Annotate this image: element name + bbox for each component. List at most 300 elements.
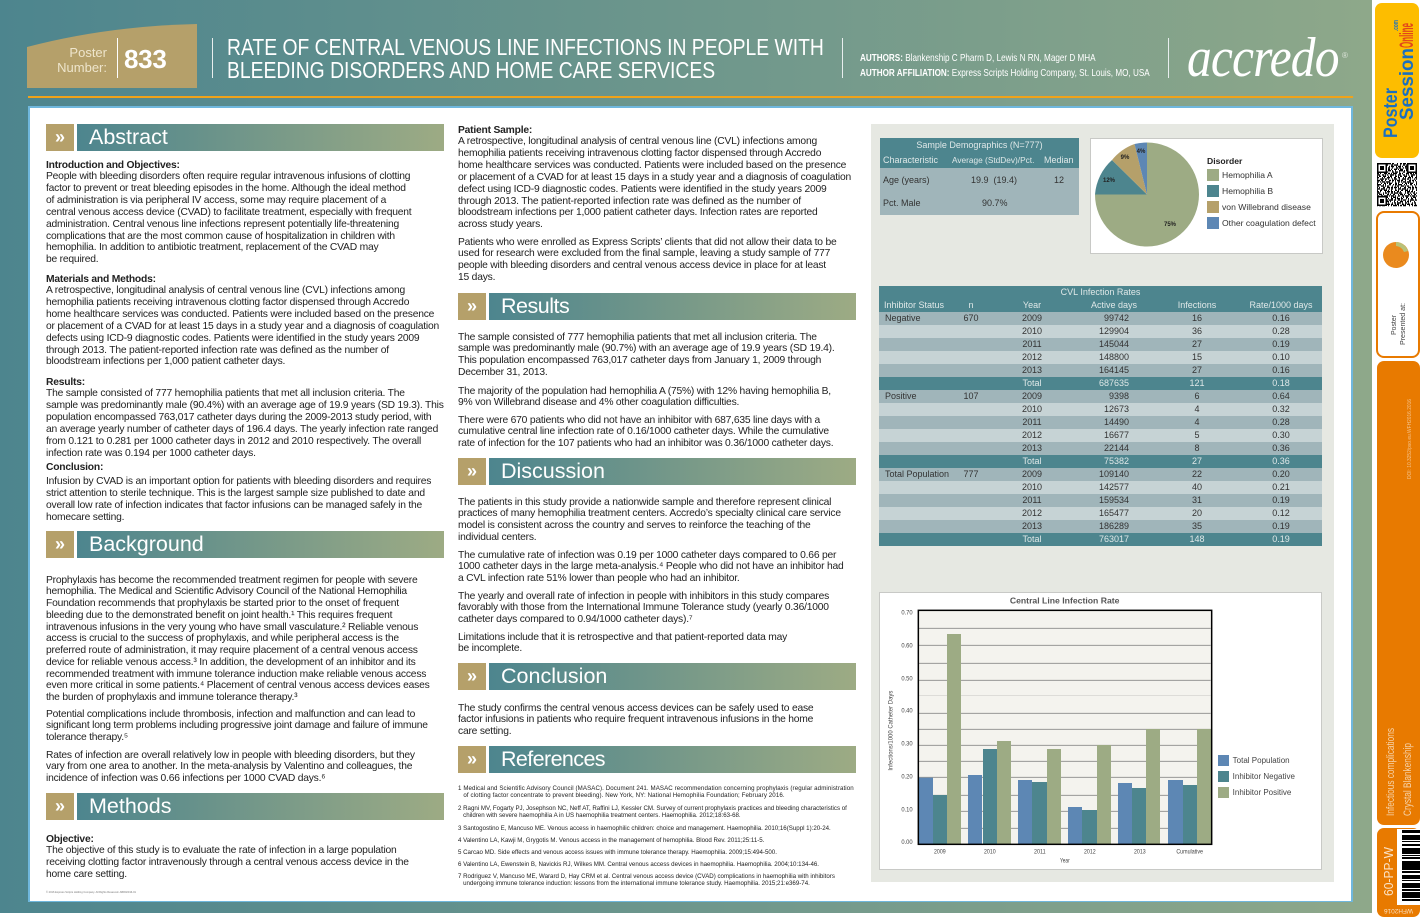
heading: discussion: » xyxy=(467,461,477,481)
table: CVL infection rates: Negative xyxy=(885,313,921,323)
table: CVL infection rates: 129904 xyxy=(1099,326,1129,336)
heading: discussion: Discussion xyxy=(501,459,605,483)
text: conclusion xyxy=(46,462,431,523)
text: exclusions: people with bleeding disorders and central venous access device in place for at least xyxy=(458,260,826,271)
text: prophylaxis xyxy=(46,574,430,703)
bar: poster topic and author xyxy=(1377,361,1420,825)
table: CVL infection rates: Positive xyxy=(885,391,917,401)
logo: poster session online xyxy=(1375,3,1419,158)
heading: references xyxy=(458,746,856,773)
text: conclusion body: The study confirms the central venous access devices can be safely used to ease xyxy=(458,702,813,714)
text: inhibitor: rate of infection for the 107 patients who had an inhibitor was 0.36/1000 catheter days. xyxy=(458,438,833,449)
chart: central line infection rate: Cumulative xyxy=(1176,848,1203,855)
text: conclusion body xyxy=(458,702,814,737)
table: CVL infection rates: 164145 xyxy=(1099,365,1129,375)
text: prophylaxis: Foundation recommends that prophylaxis be started prior to the onset of frequent xyxy=(46,598,399,609)
icon: QR code xyxy=(1377,163,1417,206)
table: CVL infection rates: 0.28 xyxy=(1272,326,1290,336)
text: prophylaxis: preferred route of administration, it may require placement of a central venous access xyxy=(46,645,418,656)
table: CVL infection rates: 0.32 xyxy=(1272,404,1290,414)
text: yearly rate: catheter days compared to 0.94/1000 catheter days).⁷ xyxy=(458,614,692,625)
table: CVL infection rates: Total xyxy=(1022,378,1042,388)
text: conclusion: overall low rate of infection indicates that factor infusions can be managed safely in the xyxy=(46,500,422,511)
panel: data figures xyxy=(871,124,1334,882)
text: results: population encompassed 763,017 catheter days during the 2009-2013 study period, with xyxy=(46,412,431,423)
table: CVL infection rates: 0.12 xyxy=(1272,508,1290,518)
chart: disorder pie: Other coagulation defect xyxy=(1222,218,1316,228)
text: yearly rate xyxy=(458,590,829,625)
table: CVL infection rates: 2012 xyxy=(1022,430,1042,440)
accredo logo: accredo xyxy=(1187,27,1339,89)
poster number badge: Number: xyxy=(57,60,107,75)
chart: central line infection rate xyxy=(879,592,1322,870)
table: CVL infection rates: 16677 xyxy=(1104,430,1129,440)
text: introduction and objectives: central venous access device (CVAD) to facilitate treatment, especially with frequent xyxy=(46,207,411,218)
text: materials and methods: A retrospective, longitudinal analysis of central venous line (CVL) infections among xyxy=(46,285,405,296)
text: complications: tolerance therapy.⁵ xyxy=(46,732,128,743)
text: objective: home care setting. xyxy=(46,869,127,880)
text: prophylaxis: access is crucial to the success of prophylaxis, and while peripheral access is the xyxy=(46,633,399,644)
text: sample xyxy=(458,332,835,378)
accredo logo xyxy=(1168,38,1353,78)
text: results: Results: xyxy=(46,376,85,388)
table: CVL infection rates: 6 xyxy=(1194,391,1200,401)
text: patient sample: defect using ICD-9 diagnostic codes. Patients were identified in the study years 2009 xyxy=(458,184,827,195)
table: CVL infection rates: 20 xyxy=(1192,508,1202,518)
text: conclusion body: factor infusions in patients who require frequent intravenous infusions in the home xyxy=(458,714,813,725)
text: sample: This population encompassed 763,017 catheter days from January 1, 2009 through xyxy=(458,355,821,366)
table: CVL infection rates: 0.10 xyxy=(1272,352,1290,362)
barcode label: 60-PP-W xyxy=(1381,846,1396,896)
table: CVL infection rates: 2010 xyxy=(1022,404,1042,414)
table: sample demographics: 12 xyxy=(1054,175,1064,185)
table: CVL infection rates: 0.16 xyxy=(1272,365,1290,375)
text: materials and methods: Materials and Methods: xyxy=(46,274,156,284)
chart: central line infection rate: Inhibitor Positive xyxy=(1233,788,1292,797)
table: CVL infection rates: 2009 xyxy=(1022,469,1042,479)
text: population: 9% von Willebrand disease and 4% other coagulation difficulties. xyxy=(458,397,739,408)
text: patient sample: home healthcare services was conducted. Patients were included based on the presence xyxy=(458,160,846,171)
reference list: 1 Medical and Scientific Advisory Council (MASAC). Document 241. MASAC recommendation concerning prophylaxis (regular administration of clotting factor concentrate to prevent bleeding). New York, NY: National Hemophilia Foundation; February 2016. xyxy=(458,785,854,799)
table: CVL infection rates: 2010 xyxy=(1022,482,1042,492)
table: sample demographics: Sample Demographics (N=777) xyxy=(916,140,1043,150)
table: CVL infection rates: 2011 xyxy=(1022,495,1042,505)
text: conclusion: homecare setting. xyxy=(46,512,124,523)
box: presented at: Presented at: xyxy=(1400,303,1407,345)
logo: poster session online: .com xyxy=(1393,20,1400,31)
panel: conclusion xyxy=(458,663,856,737)
barcode label: WFH2016 xyxy=(1383,907,1413,913)
chart: central line infection rate: 0.00 xyxy=(901,839,913,846)
chart: disorder pie: Hemophilia B xyxy=(1222,186,1273,196)
heading: background: Background xyxy=(89,532,204,556)
table: sample demographics: Pct. Male xyxy=(883,198,921,208)
text: objective: receiving clotting factor intravenously through a central venous access device in the xyxy=(46,857,409,868)
text: sample: December 31, 2013. xyxy=(458,367,548,378)
panel: methods xyxy=(46,793,444,894)
table: CVL infection rates: Active days xyxy=(1091,300,1137,310)
text: results: an average yearly number of catheter days of 196.4 days. The yearly infection rate ranged xyxy=(46,424,438,435)
reference list: 6 Valentino LA, Ewenstein B, Navickis RJ, Wilkes MM. Central venous access devices in haemophilia. Haemophilia. 2004;10:134-46. xyxy=(458,861,819,868)
table: CVL infection rates: 22 xyxy=(1192,469,1202,479)
header rule xyxy=(28,96,1353,98)
chart: central line infection rate: 0.70 xyxy=(901,609,913,616)
heading: conclusion xyxy=(458,663,856,690)
table: CVL infection rates: 5 xyxy=(1194,430,1200,440)
table: sample demographics: Characteristic xyxy=(883,155,938,165)
text: conclusion body: care setting. xyxy=(458,726,511,737)
table: CVL infection rates: 35 xyxy=(1192,521,1202,531)
reference list: 7 Rodriguez V, Mancuso ME, Warard D, Hay CRM et al. Central venous access device (CVAD) complications in haemophilia with inhibitors undergoing immune tolerance induction: lessons from the international immune tolerance study. Haemophilia. 2015;21:e369-74. xyxy=(458,873,835,887)
table: CVL infection rates: 99742 xyxy=(1104,313,1129,323)
table: CVL infection rates: 15 xyxy=(1192,352,1202,362)
table: CVL infection rates: 186289 xyxy=(1099,521,1129,531)
chart: central line infection rate: 0.60 xyxy=(901,642,913,649)
panel: discussion xyxy=(458,458,856,654)
text: exclusions: 15 days. xyxy=(458,272,495,283)
table: CVL infection rates: 0.21 xyxy=(1272,482,1290,492)
table: CVL infection rates: Inhibitor Status xyxy=(884,300,944,310)
text: limitations: be incomplete. xyxy=(458,643,522,654)
box: presented at xyxy=(1377,212,1419,357)
text: introduction and objectives: administration. Central venous line infections represent potentially life-threatening xyxy=(46,219,399,230)
table: CVL infection rates: 2013 xyxy=(1022,443,1042,453)
table: CVL infection rates: 27 xyxy=(1192,365,1202,375)
text: rates of infection: incidence of infection was 0.66 infections per 1000 CVAD days.⁶ xyxy=(46,773,325,784)
text: sample: The sample consisted of 777 hemophilia patients that met all inclusion criteria. The xyxy=(458,332,817,342)
text: yearly rate: favorably with those from the International Immune Tolerance study (yearly 0.36/1000 xyxy=(458,602,829,613)
table: CVL infection rates: 0.30 xyxy=(1272,430,1290,440)
chart: disorder pie: 4% xyxy=(1137,149,1146,155)
table: CVL infection rates: Infections xyxy=(1178,300,1216,310)
chart: central line infection rate: 0.40 xyxy=(901,707,913,714)
chart: central line infection rate: Year xyxy=(1060,857,1070,864)
table: CVL infection rates: 40 xyxy=(1192,482,1202,492)
heading: methods: Methods xyxy=(89,794,171,818)
table: sample demographics: Age (years) xyxy=(883,175,930,185)
table: sample demographics: Average (StdDev)/Pct. xyxy=(952,155,1034,165)
table: CVL infection rates: 763017 xyxy=(1099,534,1129,544)
heading: references: » xyxy=(467,749,477,769)
table: CVL infection rates: 121 xyxy=(1189,378,1205,388)
table: CVL infection rates: 148 xyxy=(1189,534,1205,544)
text: introduction and objectives: factor to prevent or treat bleeding episodes in the home. Although the ideal method xyxy=(46,183,406,194)
text: population: The majority of the population had hemophilia A (75%) with 12% having hemophilia B, xyxy=(458,386,831,396)
text: exclusions: used for research were excluded from the final sample, leaving a study sample of 777 xyxy=(458,248,830,259)
table: CVL infection rates: 31 xyxy=(1192,495,1202,505)
chart: central line infection rate: Central Line Infection Rate xyxy=(1010,596,1120,606)
text: nationwide sample: The patients in this study provide a nationwide sample and therefore represent clinical xyxy=(458,496,831,508)
table: CVL infection rates: Total xyxy=(1022,534,1042,544)
chart: central line infection rate: 0.20 xyxy=(901,773,913,780)
text: prophylaxis: hemophilia. The Medical and Scientific Advisory Council of the National Hemophilia xyxy=(46,586,407,597)
table: CVL infection rates: 22144 xyxy=(1104,443,1129,453)
table: CVL infection rates: 2012 xyxy=(1022,508,1042,518)
table: CVL infection rates: 0.20 xyxy=(1272,469,1290,479)
text: complications xyxy=(46,708,428,743)
reference list xyxy=(458,785,854,887)
reference list: 2 Ragni MV, Fogarty PJ, Josephson NC, Neff AT, Raffini LJ, Kessler CM. Survey of current prophylaxis practices and bleeding characteristics of children with severe haemophilia A in US haemophilia treatment centers. Haemophilia. 2012;18:63-68. xyxy=(458,805,847,819)
text: prophylaxis: bleeding due to the demonstrated benefit on joint health.¹ This requires frequent xyxy=(46,610,392,621)
table: CVL infection rates: 4 xyxy=(1194,404,1200,414)
table: CVL infection rates: 4 xyxy=(1194,417,1200,427)
table: CVL infection rates: 2013 xyxy=(1022,521,1042,531)
text: objective: The objective of this study is to evaluate the rate of infection in a large population xyxy=(46,845,397,856)
table: CVL infection rates: 142577 xyxy=(1099,482,1129,492)
chart: central line infection rate: Total Population xyxy=(1233,756,1290,765)
table: CVL infection rates: Total Population xyxy=(885,469,949,479)
chart: disorder pie: 9% xyxy=(1121,155,1130,161)
table: CVL infection rates: 2010 xyxy=(1022,326,1042,336)
reference list: 4 Valentino LA, Kawji M, Grygotis M. Venous access in the management of hemophilia. Blood Rev. 2011;25:11-5. xyxy=(458,837,764,844)
text: introduction and objectives: hemophilia. In addition to antibiotic treatment, replacement of the CVAD may xyxy=(46,242,378,253)
chart: central line infection rate: 2013 xyxy=(1134,848,1146,855)
text: limitations: Limitations include that it is retrospective and that patient-reported data may xyxy=(458,632,787,642)
text: objective: Objective: xyxy=(46,834,94,844)
reference list: 3 Santogostino E, Mancuso ME. Venous access in haemophilic children: choice and management. Haemophilia. 2010;16(Suppl 1):20-24. xyxy=(458,825,831,832)
text: rates of infection xyxy=(46,750,415,784)
table: CVL infection rates: Year xyxy=(1023,300,1041,310)
text: nationwide sample: practices of many hemophilia treatment centers. Accredo’s specialty clinical care service xyxy=(458,508,841,519)
bar: poster topic and author: DOI: 10.3252/pso.eu.WFH2016.2016 xyxy=(1407,399,1413,479)
table: CVL infection rates: 687635 xyxy=(1099,378,1129,388)
heading: abstract: » xyxy=(55,127,65,147)
text: nationwide sample: model is consistent across the country and serves to reinforce the teaching of the xyxy=(458,520,811,531)
text: introduction and objectives: People with bleeding disorders often require regular intravenous infusions of clotting xyxy=(46,171,410,182)
text: prophylaxis: the burden of prophylaxis and immune tolerance therapy.³ xyxy=(46,692,297,703)
title: RATE OF CENTRAL VENOUS LINE INFECTIONS IN PEOPLE WITH xyxy=(227,34,824,60)
table: CVL infection rates: 36 xyxy=(1192,326,1202,336)
panel: abstract xyxy=(46,124,444,523)
text: patient sample: across study years. xyxy=(458,219,543,230)
logo: poster session online: Poster xyxy=(1381,87,1402,138)
chart: central line infection rate: 2012 xyxy=(1084,848,1096,855)
text: population xyxy=(458,386,831,408)
text: complications: significant long term problems including progressive joint damage and failure of immune xyxy=(46,720,428,731)
title: BLEEDING DISORDERS AND HOME CARE SERVICES xyxy=(227,57,715,83)
heading: results xyxy=(458,293,856,320)
text: patient sample: Patient Sample: xyxy=(458,124,532,136)
table: CVL infection rates: 109140 xyxy=(1099,469,1129,479)
text: cumulative rate: 1000 catheter days in the large meta-analysis.⁴ People who did not have an inhibitor had xyxy=(458,561,844,572)
text: rates of infection: Rates of infection are overall relatively low in people with bleeding disorders, but they xyxy=(46,750,415,760)
text: conclusion: Infusion by CVAD is an important option for patients with bleeding disorders and requires xyxy=(46,476,431,487)
poster number badge: Poster xyxy=(69,45,107,60)
chart: central line infection rate: Inhibitor Negative xyxy=(1233,772,1295,781)
heading: abstract: Abstract xyxy=(89,125,168,149)
text: results xyxy=(46,376,444,459)
text: limitations xyxy=(458,632,788,654)
heading: references: References xyxy=(501,747,605,771)
table: CVL infection rates: 0.16 xyxy=(1272,313,1290,323)
chart: central line infection rate: Infections/1000 Catheter Days xyxy=(888,691,895,771)
chart: disorder pie: 12% xyxy=(1103,178,1116,184)
poster number badge xyxy=(27,24,197,88)
text: exclusions: Patients who were enrolled as Express Scripts’ clients that did not allow their data to be xyxy=(458,236,837,248)
text: inhibitor: cumulative central line infection rate of 0.16/1000 catheter days. While the cumulative xyxy=(458,426,829,437)
heading: methods xyxy=(46,793,444,820)
chart: disorder pie: 75% xyxy=(1164,222,1177,228)
table: CVL infection rates: 9398 xyxy=(1109,391,1129,401)
text: inhibitor xyxy=(458,414,833,449)
panel: patient sample xyxy=(458,124,851,283)
text: patient sample: hemophilia patients receiving intravenous clotting factor dispensed through Accredo xyxy=(458,148,821,159)
heading: results: » xyxy=(467,296,477,316)
table: CVL infection rates: 2011 xyxy=(1022,339,1042,349)
table: CVL infection rates: n xyxy=(968,300,974,310)
box: presented at: Poster xyxy=(1391,314,1398,335)
heading: conclusion: Conclusion xyxy=(501,664,607,688)
table: CVL infection rates: 145044 xyxy=(1099,339,1129,349)
chart: central line infection rate: 2009 xyxy=(934,848,946,855)
heading: conclusion: » xyxy=(467,666,477,686)
text: cumulative rate: The cumulative rate of infection was 0.19 per 1000 catheter days compared to 0.66 per xyxy=(458,550,836,560)
table: CVL infection rates: 0.19 xyxy=(1272,534,1290,544)
panel: poster session sidebar xyxy=(1375,3,1420,917)
text: prophylaxis: Prophylaxis has become the recommended treatment regimen for people with severe xyxy=(46,574,417,586)
chart: disorder pie: Disorder xyxy=(1207,156,1243,166)
table: CVL infection rates: 2012 xyxy=(1022,352,1042,362)
heading: methods: » xyxy=(55,796,65,816)
authors and affiliation: AUTHOR AFFILIATION: Express Scripts Holding Company, St. Louis, MO, USA xyxy=(860,66,1150,78)
text: objective xyxy=(46,834,409,880)
table: CVL infection rates: 148800 xyxy=(1099,352,1129,362)
table: CVL infection rates: 75382 xyxy=(1104,456,1129,466)
text: conclusion: Conclusion: xyxy=(46,462,103,472)
text: patient sample xyxy=(458,124,851,230)
table: CVL infection rates: 0.64 xyxy=(1272,391,1290,401)
table: CVL infection rates: 159534 xyxy=(1099,495,1129,505)
text: results: from 0.121 to 0.281 per 1000 catheter days in 2012 and 2010 respectively. The overall xyxy=(46,436,421,447)
text: materials and methods xyxy=(46,274,439,367)
text: cumulative rate: a CVL infection rate 51% lower than people who had an inhibitor. xyxy=(458,573,740,584)
text: prophylaxis: recommended treatment with immune tolerance induction make reliable venous access xyxy=(46,668,426,680)
table: CVL infection rates xyxy=(879,286,1322,546)
table: sample demographics: Median xyxy=(1044,155,1074,165)
authors and affiliation xyxy=(842,38,1152,78)
text: results: infection rate was 0.194 per 1000 catheter days. xyxy=(46,448,256,459)
table: CVL infection rates: 16 xyxy=(1192,313,1202,323)
text: conclusion: strict attention to sterile technique. This is the largest sample size published to date and xyxy=(46,488,425,499)
panel: results xyxy=(458,293,856,449)
text: materials and methods: defects using ICD-9 diagnostic codes. Patients were identified in the study years 2009 xyxy=(46,333,419,344)
panel: references xyxy=(458,746,856,887)
text: results: The sample consisted of 777 hemophilia patients that met all inclusion criteria. The xyxy=(46,388,405,399)
barcode label xyxy=(1377,828,1420,917)
text: patient sample: bloodstream infections per 1,000 patient catheter days. Infection rates are reported xyxy=(458,207,818,218)
heading: results: Results xyxy=(501,294,569,318)
text: introduction and objectives: Introduction and Objectives: xyxy=(46,160,180,170)
text: introduction and objectives: be required. xyxy=(46,254,98,265)
logo: poster session online: Session xyxy=(1397,48,1418,120)
text: exclusions xyxy=(458,236,837,283)
table: CVL infection rates: 12673 xyxy=(1104,404,1129,414)
table: CVL infection rates: 165477 xyxy=(1099,508,1129,518)
text: prophylaxis: even more critical in some patients.⁴ Placement of central venous access devices eases xyxy=(46,680,430,691)
bar: poster topic and author: Infectious complications xyxy=(1385,728,1397,816)
text: introduction and objectives: complications that are the most common cause of hospitalization in children with xyxy=(46,231,395,242)
table: CVL infection rates: 27 xyxy=(1192,339,1202,349)
table: CVL infection rates: CVL Infection Rates xyxy=(1061,287,1140,297)
copyright note: © 2016 Express Scripts Holding Company. All Rights Reserved. ABR02016-01 xyxy=(46,890,136,894)
authors and affiliation: AUTHORS: Blankenship C Pharm D, Lewis N RN, Mager D MHA xyxy=(860,52,1096,64)
table: CVL infection rates: 0.36 xyxy=(1272,456,1290,466)
text: prophylaxis: device for reliable venous access.³ In addition, the development of an inhibitor and its xyxy=(46,657,416,668)
heading: background: » xyxy=(55,534,65,554)
text: materials and methods: or placement of a CVAD for at least 15 days in a study year and a diagnosis of coagulation xyxy=(46,321,439,332)
table: CVL infection rates: 14490 xyxy=(1104,417,1129,427)
heading: background xyxy=(46,531,444,558)
reference list: 5 Carcao MD. Side effects and venous access issues with immune tolerance therapy. Haemophilia. 2009;15:494-500. xyxy=(458,849,777,856)
text: materials and methods: home healthcare services was conducted. Patients were included based on the presence xyxy=(46,309,434,320)
table: sample demographics: 90.7% xyxy=(982,198,1008,208)
table: sample demographics xyxy=(880,138,1079,215)
text: yearly rate: The yearly and overall rate of infection in people with inhibitors in this study compares xyxy=(458,590,829,602)
title xyxy=(212,38,824,78)
table: CVL infection rates: 27 xyxy=(1192,456,1202,466)
text: patient sample: A retrospective, longitudinal analysis of central venous line (CVL) infections among xyxy=(458,136,817,147)
text: rates of infection: vary from one area to another. In the meta-analysis by Valentino and colleagues, the xyxy=(46,761,412,772)
table: CVL infection rates: 0.28 xyxy=(1272,417,1290,427)
text: results: sample was predominantly male (90.4%) with an average age of 19.9 years (SD 19.3). This xyxy=(46,400,444,411)
chart: central line infection rate: 2010 xyxy=(984,848,996,855)
chart: central line infection rate: 0.50 xyxy=(901,675,913,682)
table: CVL infection rates: 8 xyxy=(1194,443,1200,453)
chart: disorder pie xyxy=(1090,138,1323,254)
table: CVL infection rates: 0.19 xyxy=(1272,339,1290,349)
table: CVL infection rates: Rate/1000 days xyxy=(1249,300,1313,310)
table: CVL infection rates: 2011 xyxy=(1022,417,1042,427)
table: CVL infection rates: 107 xyxy=(963,391,979,401)
chart: central line infection rate: 0.10 xyxy=(901,806,913,813)
table: sample demographics: 19.9 (19.4) xyxy=(971,175,1017,185)
table: CVL infection rates: 670 xyxy=(963,313,979,323)
accredo logo: ® xyxy=(1342,51,1348,60)
text: patient sample: through 2013. The patient-reported infection rate was defined as the number of xyxy=(458,196,801,207)
table: CVL infection rates: 0.36 xyxy=(1272,443,1290,453)
text: materials and methods: hemophilia patients receiving intravenous clotting factor dispensed through Accredo xyxy=(46,297,409,308)
text: materials and methods: bloodstream infections per 1,000 patient catheter days. xyxy=(46,356,285,367)
table: CVL infection rates: 2009 xyxy=(1022,313,1042,323)
heading: abstract xyxy=(46,124,444,151)
table: CVL infection rates: 777 xyxy=(963,469,979,479)
chart: central line infection rate: 2011 xyxy=(1034,848,1046,855)
bar: poster topic and author: Crystal Blankenship xyxy=(1402,743,1414,816)
text: materials and methods: through 2013. The patient-reported infection rate was defined as the number of xyxy=(46,345,389,356)
chart: disorder pie: Hemophilia A xyxy=(1222,170,1273,180)
chart: central line infection rate: 0.30 xyxy=(901,740,913,747)
text: prophylaxis: intravenous infusions in the very young who have small vasculature.² Reliable venous xyxy=(46,622,418,632)
poster number badge: 833 xyxy=(124,44,166,74)
chart: disorder pie: von Willebrand disease xyxy=(1222,202,1311,212)
text: cumulative rate xyxy=(458,550,844,584)
table: CVL infection rates: 0.19 xyxy=(1272,495,1290,505)
table: CVL infection rates: 2013 xyxy=(1022,365,1042,375)
text: introduction and objectives xyxy=(46,160,412,265)
heading: discussion xyxy=(458,458,856,485)
text: patient sample: or placement of a CVAD for at least 15 days in a study year and a diagnosis of coagulation xyxy=(458,172,851,183)
text: complications: Potential complications include thrombosis, infection and malfunction and can lead to xyxy=(46,708,415,720)
text: nationwide sample xyxy=(458,496,841,543)
table: CVL infection rates: 0.19 xyxy=(1272,521,1290,531)
table: CVL infection rates: Total xyxy=(1022,456,1042,466)
panel: background xyxy=(46,531,444,784)
text: nationwide sample: individual centers. xyxy=(458,532,536,543)
table: CVL infection rates: 0.18 xyxy=(1272,378,1290,388)
text: introduction and objectives: of administration is via peripheral IV access, some may require placement of a xyxy=(46,195,386,206)
table: CVL infection rates: 2009 xyxy=(1022,391,1042,401)
text: inhibitor: There were 670 patients who did not have an inhibitor with 687,635 line days with a xyxy=(458,414,820,426)
